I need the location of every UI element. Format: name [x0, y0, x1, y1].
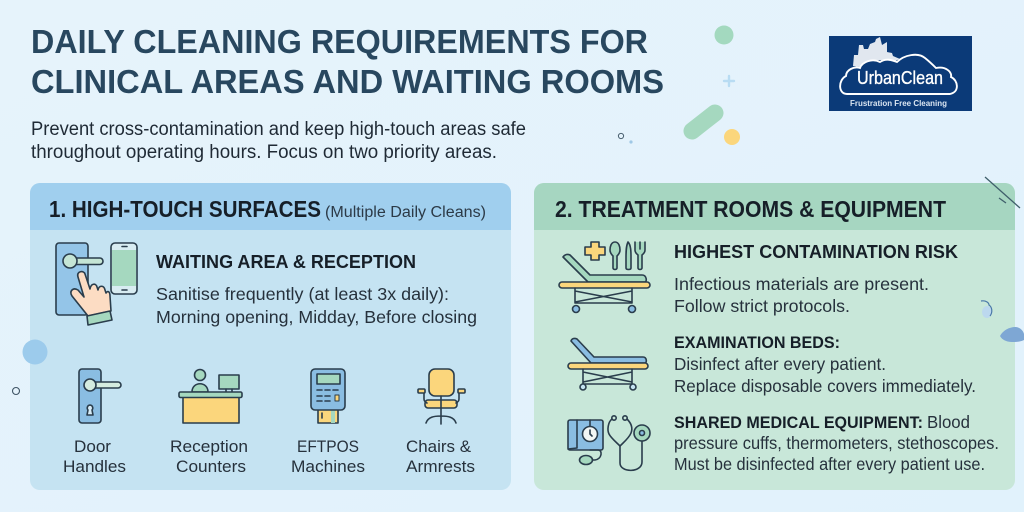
text: waiting area and reception: Morning opening, Midday, Before closing	[156, 307, 477, 327]
decorative accents	[12, 177, 1024, 394]
label: EFTPOS machines	[291, 437, 365, 476]
subtitle	[31, 119, 526, 163]
text: waiting area and reception: WAITING AREA & RECEPTION	[156, 252, 416, 272]
text: highest contamination risk: Follow strict protocols.	[674, 296, 850, 316]
icon: hand touching door handle and phone	[56, 243, 137, 325]
text: shared medical equipment: SHARED MEDICAL EQUIPMENT:	[674, 413, 923, 432]
text: highest contamination risk: Infectious materials are present.	[674, 274, 929, 294]
panel: high-touch surfaces	[30, 183, 511, 490]
text: shared medical equipment: Blood	[927, 412, 970, 432]
label: EFTPOS machines: Machines	[291, 457, 365, 476]
icon: treatment bed with cross and utensils	[559, 242, 650, 312]
text: examination beds	[674, 333, 976, 396]
label: door handles	[63, 437, 126, 476]
subtitle: throughout operating hours. Focus on two priority areas.	[31, 142, 497, 163]
panel header: treatment rooms: 2. TREATMENT ROOMS & EQUIPMENT	[555, 196, 946, 222]
panel header: high-touch surfaces: (Multiple Daily Cleans)	[325, 204, 486, 221]
text: examination beds: Disinfect after every patient.	[674, 354, 886, 374]
icon: door handle	[79, 369, 121, 423]
text: shared medical equipment: Must be disinfected after every patient use.	[674, 454, 985, 474]
title: DAILY CLEANING REQUIREMENTS FOR	[31, 23, 648, 60]
icon: reception counter	[179, 370, 242, 423]
logo: UrbanClean: UrbanClean	[857, 68, 943, 88]
title: CLINICAL AREAS AND WAITING ROOMS	[31, 63, 664, 100]
label: chairs and armrests	[406, 437, 475, 476]
label: chairs and armrests: Armrests	[406, 457, 475, 476]
text: shared medical equipment	[674, 412, 999, 474]
decorative shapes	[618, 26, 740, 145]
text: shared medical equipment: pressure cuffs, thermometers, stethoscopes.	[674, 433, 999, 453]
label: reception counters	[170, 437, 248, 476]
icon: office chair	[418, 369, 465, 424]
panel: treatment rooms and equipment	[534, 183, 1015, 490]
label: reception counters: Counters	[176, 457, 246, 476]
logo: UrbanClean	[829, 36, 972, 111]
text: highest contamination risk	[674, 242, 958, 316]
panel header: high-touch surfaces	[30, 183, 511, 230]
text: highest contamination risk: HIGHEST CONTAMINATION RISK	[674, 242, 958, 262]
logo: UrbanClean: Frustration Free Cleaning	[850, 99, 947, 108]
label: reception counters: Reception	[170, 437, 248, 456]
subtitle: Prevent cross-contamination and keep high-touch areas safe	[31, 119, 526, 140]
icon: EFTPOS machine	[311, 369, 345, 423]
panel header: high-touch surfaces: 1. HIGH-TOUCH SURFACES	[49, 196, 321, 222]
icon: blood pressure cuff and stethoscope	[568, 416, 650, 470]
text: examination beds: EXAMINATION BEDS:	[674, 333, 840, 352]
label: door handles: Door	[74, 437, 111, 456]
title	[31, 23, 664, 100]
icon: examination bed	[568, 338, 648, 390]
panel header: treatment rooms	[534, 183, 1015, 230]
label: door handles: Handles	[63, 457, 126, 476]
text: examination beds: Replace disposable covers immediately.	[674, 376, 976, 396]
text: waiting area and reception: Sanitise frequently (at least 3x daily):	[156, 284, 449, 304]
label: chairs and armrests: Chairs &	[406, 437, 472, 456]
label: EFTPOS machines: EFTPOS	[297, 437, 359, 456]
text: waiting area and reception	[156, 252, 477, 327]
